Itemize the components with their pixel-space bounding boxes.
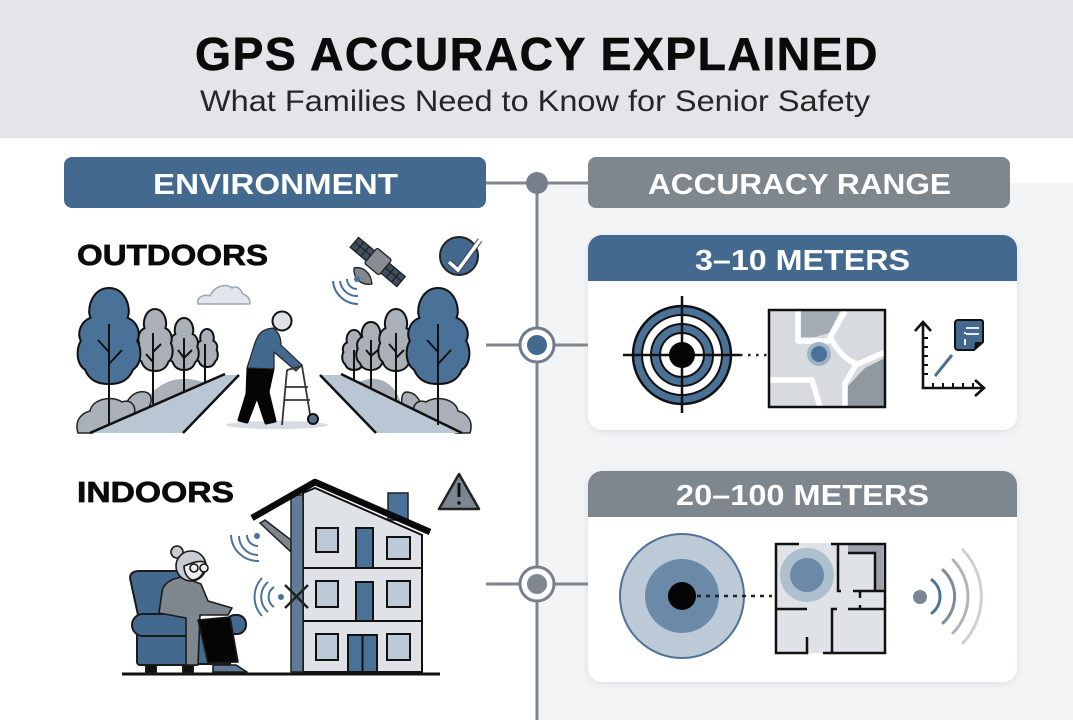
ground line (122, 672, 440, 676)
trees left (78, 288, 218, 425)
icon: weak signal (913, 550, 981, 643)
cloud (198, 286, 250, 304)
illustration: outdoor park path (77, 234, 480, 433)
column heading: accuracy range (588, 157, 1010, 208)
chimney (388, 493, 408, 520)
column heading: accuracy range: ACCURACY RANGE (648, 169, 951, 201)
signal waves passing (231, 533, 260, 561)
card header (588, 235, 1017, 281)
icon: warning triangle (439, 474, 479, 509)
subtitle: What Families Need to Know for Senior Safety (200, 85, 870, 118)
armchair (130, 571, 246, 673)
icon: target (623, 296, 808, 413)
header band (0, 0, 1073, 138)
trees right (342, 288, 469, 425)
icon: wide accuracy circle (620, 534, 772, 658)
card header (588, 471, 1017, 517)
heading: outdoors: OUTDOORS (77, 240, 268, 272)
floor plan (776, 543, 885, 653)
bushes left (77, 379, 212, 433)
illustration: indoor house and senior (122, 474, 479, 674)
satellite (333, 234, 408, 304)
card: 3-10 meters: 3–10 METERS (695, 245, 910, 277)
central connector timeline (486, 172, 588, 720)
signal waves blocked (255, 578, 308, 616)
card: 20-100 meters (588, 471, 1017, 682)
senior with walker (226, 312, 328, 429)
card: 3-10 meters (588, 235, 1017, 430)
icon: chart and note (915, 320, 984, 396)
heading: indoors: INDOORS (77, 477, 234, 509)
column heading: environment: ENVIRONMENT (153, 169, 398, 201)
map with location (769, 310, 885, 407)
icon: check badge (440, 237, 480, 275)
card: 20-100 meters: 20–100 METERS (676, 480, 929, 512)
house (252, 482, 430, 672)
bushes right (350, 379, 471, 433)
roads (90, 375, 239, 433)
column heading: environment (64, 157, 486, 208)
title: GPS ACCURACY EXPLAINED (195, 28, 879, 80)
seated senior (159, 546, 247, 672)
